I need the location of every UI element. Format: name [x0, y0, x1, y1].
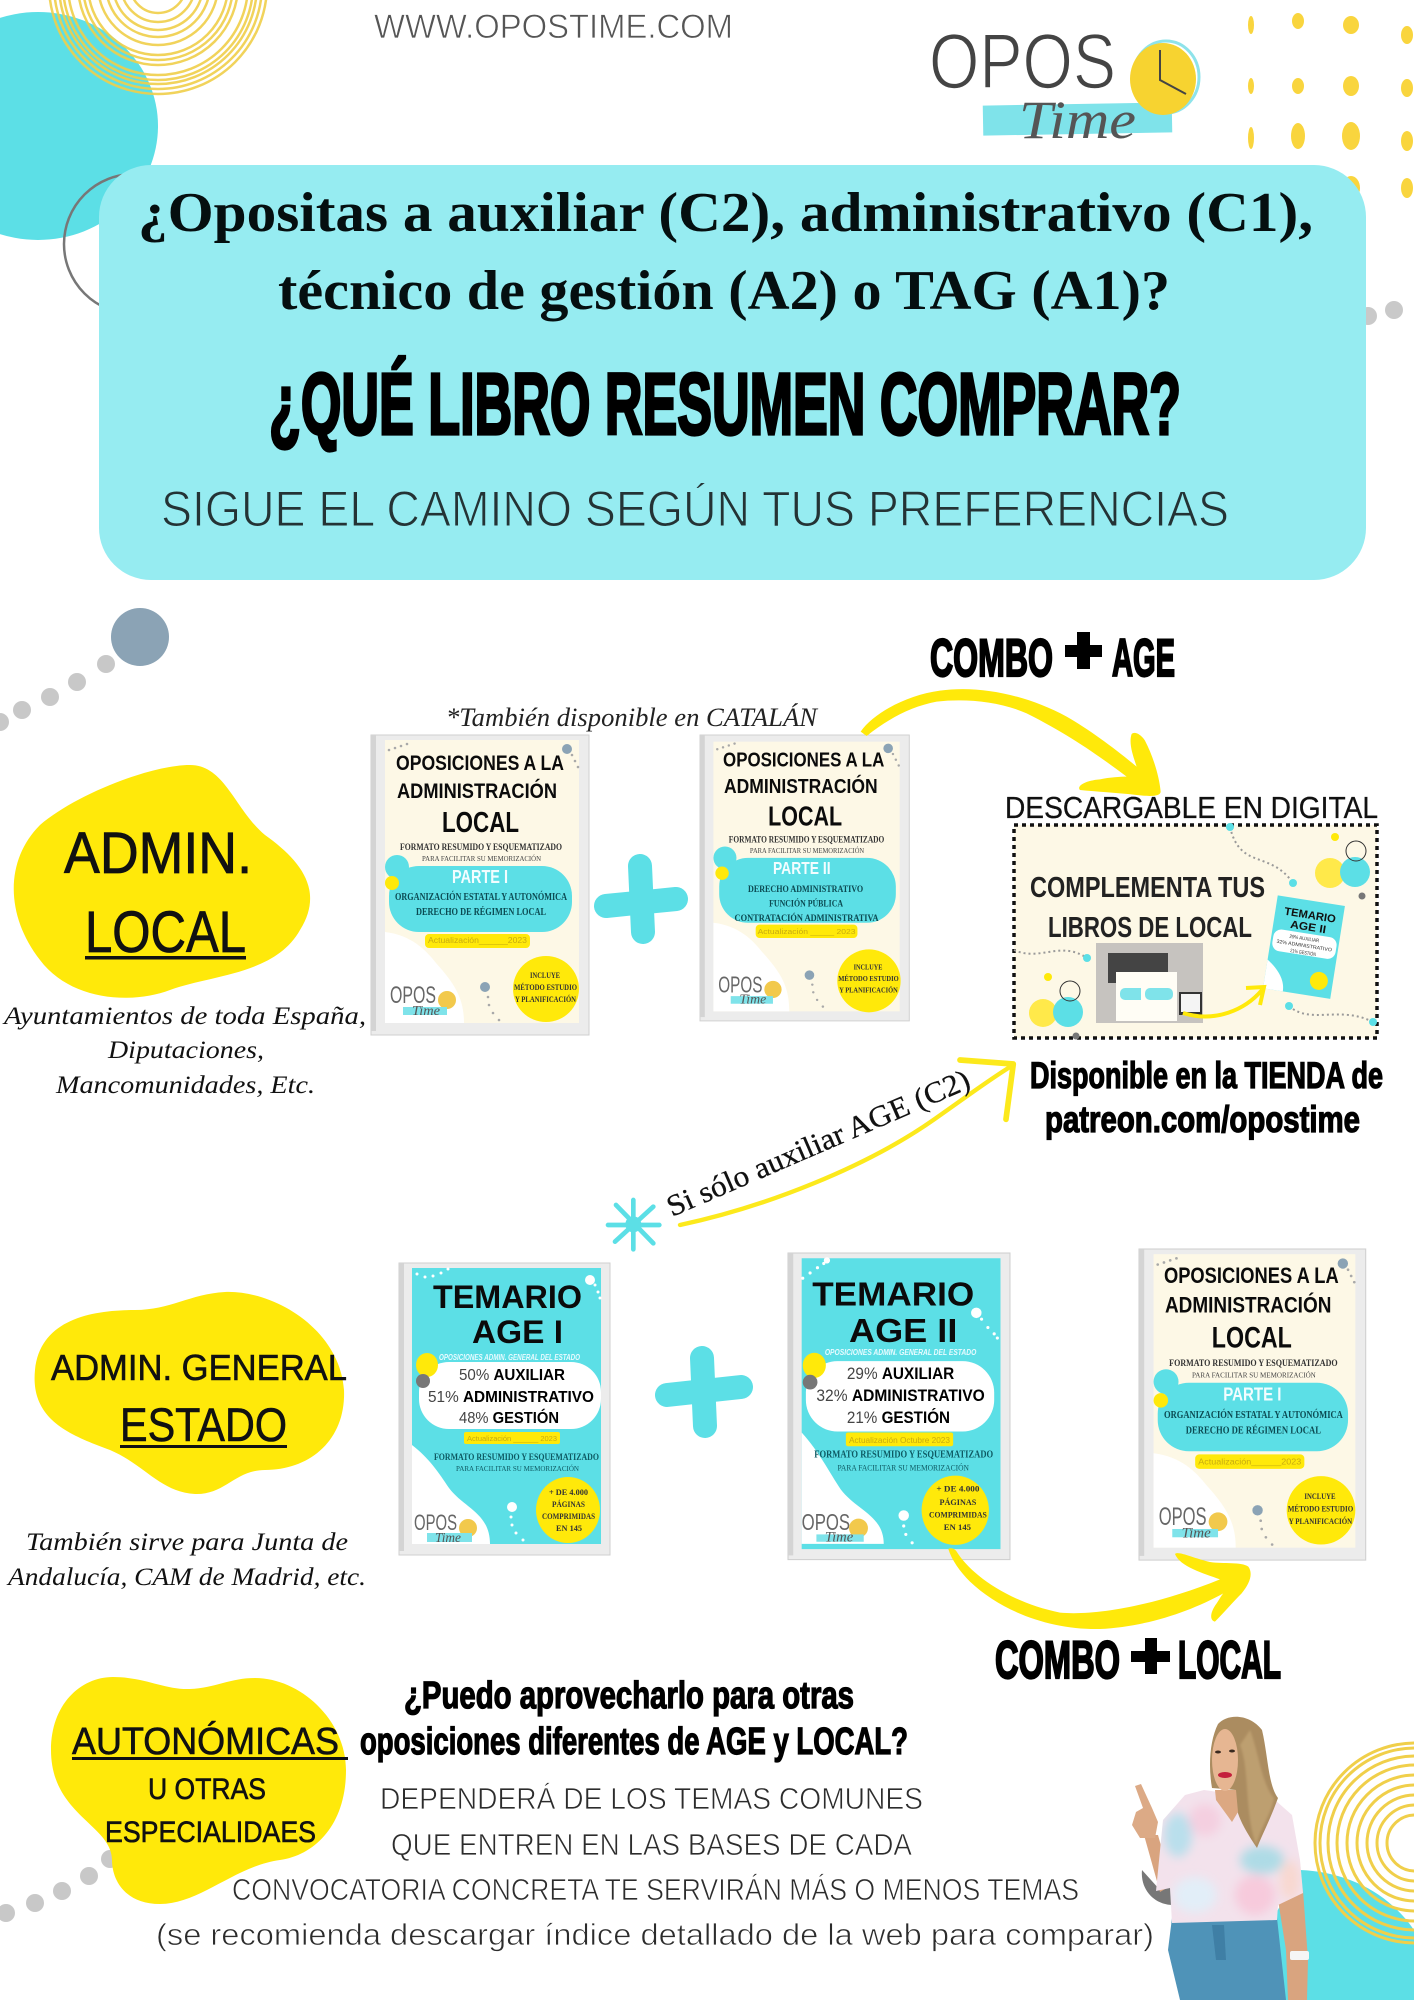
book: Temario AGE II: FORMATO RESUMIDO Y ESQUEMATIZADO	[814, 1450, 993, 1461]
blob label: Admin. General Estado	[35, 1292, 347, 1494]
blob label: Admin. General Estado: ESTADO	[120, 1398, 287, 1451]
icon: teal asterisk	[608, 1200, 659, 1249]
book: Temario AGE I: 48% GESTIÓN	[459, 1408, 559, 1427]
book: Oposiciones Local parte II: Actualización _____ 2023	[758, 927, 856, 936]
panel: digital product: 21% GESTIÓN	[1290, 947, 1317, 958]
book: Oposiciones Local parte II: PARA FACILITAR SU MEMORIZACIÓN	[750, 845, 864, 855]
heading: combo + local: LOCAL	[1178, 1631, 1281, 1690]
book: Oposiciones Local parte I	[371, 735, 589, 1035]
book: Temario AGE II: 21% GESTIÓN	[847, 1408, 950, 1427]
book: Temario AGE I: Actualización ______ 2023	[467, 1434, 557, 1443]
book: Oposiciones Local parte I (combo): Actualización______2023	[1198, 1457, 1302, 1467]
book: Oposiciones Local parte I (combo): MÉTODO ESTUDIO	[1288, 1503, 1354, 1513]
book: Temario AGE II: PARA FACILITAR SU MEMORIZACIÓN	[837, 1462, 969, 1472]
description: Admin. Local: Diputaciones,	[107, 1037, 264, 1064]
book: Oposiciones Local parte I: PARTE I	[452, 867, 508, 887]
book: Oposiciones Local parte II: Y PLANIFICACIÓN	[839, 984, 898, 994]
panel: digital product: AGE II	[1289, 919, 1327, 936]
book: Oposiciones Local parte II: FUNCIÓN PÚBLICA	[769, 898, 843, 910]
decoration: blue circle and grey dots	[0, 608, 169, 731]
book: Oposiciones Local parte I (combo): INCLUYE	[1304, 1492, 1336, 1501]
icon: plus between AGE books	[667, 1358, 741, 1426]
book: Temario AGE I: OPOSICIONES ADMIN. GENERAL DEL ESTADO	[439, 1353, 581, 1362]
book: Temario AGE I: COMPRIMIDAS	[542, 1512, 595, 1521]
book: Temario AGE I: AGE I	[472, 1314, 563, 1350]
book: Oposiciones Local parte I: Actualización______2023	[428, 936, 528, 945]
book: Oposiciones Local parte I (combo): Time	[1182, 1525, 1211, 1541]
book: Oposiciones Local parte I: OPOS	[390, 982, 436, 1009]
book: Oposiciones Local parte I (combo): Y PLANIFICACIÓN	[1289, 1516, 1352, 1526]
decoration: teal shape bottom right	[1275, 1870, 1414, 2000]
book: Oposiciones Local parte II: Time	[739, 992, 766, 1007]
panel: digital product: TEMARIO	[1283, 906, 1337, 926]
panel: digital product: 32% ADMINISTRATIVO	[1276, 939, 1332, 954]
panel: digital product: 29% AUXILIAR	[1289, 934, 1320, 944]
decoration: yellow spiral top left	[49, 0, 267, 94]
decoration: yellow dots top right	[1248, 13, 1413, 200]
note: Catalan edition: *También disponible en CATALÁN	[446, 703, 819, 732]
panel: digital product	[1014, 823, 1377, 1040]
book: Temario AGE II: OPOSICIONES ADMIN. GENERAL DEL ESTADO	[825, 1347, 977, 1357]
book: Oposiciones Local parte I: PARA FACILITAR SU MEMORIZACIÓN	[422, 853, 542, 863]
book: Temario AGE I: OPOS	[414, 1510, 457, 1535]
book: Temario AGE II: Actualización Octubre 2023	[849, 1436, 951, 1445]
heading: combo + local: COMBO	[995, 1631, 1120, 1690]
book: Oposiciones Local parte II: MÉTODO ESTUDIO	[838, 973, 899, 983]
question heading: oposiciones diferentes de AGE y LOCAL?	[360, 1721, 908, 1763]
book: Oposiciones Local parte I (combo): ADMINISTRACIÓN	[1165, 1292, 1331, 1317]
logo: OposTime: OPOS	[929, 17, 1116, 105]
book: Oposiciones Local parte I: Y PLANIFICACIÓN	[515, 994, 576, 1004]
blob label: Admin. General Estado: ADMIN. GENERAL	[51, 1347, 347, 1388]
book: Oposiciones Local parte I: MÉTODO ESTUDIO	[514, 982, 577, 992]
description: Admin. Local: Mancomunidades, Etc.	[55, 1072, 315, 1099]
book: Temario AGE II: Time	[825, 1530, 854, 1546]
book: Temario AGE I: 50% AUXILIAR	[459, 1367, 565, 1384]
logo: OposTime: Time	[1019, 90, 1136, 150]
book: Temario AGE I: FORMATO RESUMIDO Y ESQUEMATIZADO	[434, 1453, 599, 1463]
illustration: presenter pointing up	[1132, 1717, 1309, 2000]
decoration: grey dots bottom left	[0, 1850, 119, 1922]
description: Admin. Estado	[6, 1529, 366, 1591]
heading: combo + AGE: COMBO	[930, 629, 1053, 688]
book: Oposiciones Local parte II: DERECHO ADMINISTRATIVO	[748, 884, 863, 895]
panel: digital product: COMPLEMENTA TUS	[1030, 872, 1265, 904]
answer text	[156, 1781, 1154, 1952]
book: Oposiciones Local parte I (combo): LOCAL	[1212, 1322, 1292, 1355]
text: availability	[1030, 1055, 1383, 1140]
description: Admin. Local: Ayuntamientos de toda España,	[2, 1003, 366, 1030]
description: Admin. Estado: Andalucía, CAM de Madrid, etc.	[6, 1564, 366, 1591]
book: Oposiciones Local parte II: CONTRATACIÓN ADMINISTRATIVA	[735, 912, 879, 924]
book: Oposiciones Local parte II: PARTE II	[773, 858, 831, 878]
book: Temario AGE I: TEMARIO	[433, 1279, 582, 1315]
decoration: teal circle top left	[0, 12, 158, 240]
book: Oposiciones Local parte I: OPOSICIONES A LA	[396, 752, 564, 775]
book: Oposiciones Local parte I (combo): OPOSICIONES A LA	[1164, 1263, 1339, 1288]
book: Temario AGE II: TEMARIO	[812, 1277, 974, 1313]
decoration: grey crescent behind person	[1142, 1870, 1180, 1905]
book: Oposiciones Local parte I: INCLUYE	[530, 971, 560, 980]
subheading: SIGUE EL CAMINO SEGÚN TUS PREFERENCIAS	[161, 481, 1229, 537]
book: Oposiciones Local parte II: OPOS	[718, 971, 762, 997]
blob label: Autonómicas: U OTRAS	[148, 1773, 266, 1806]
book: Oposiciones Local parte II: ADMINISTRACIÓN	[724, 774, 878, 798]
description: Admin. Estado: También sirve para Junta de	[26, 1529, 348, 1556]
decoration: grey dots right of panel	[1359, 301, 1403, 325]
book: Oposiciones Local parte I (combo): OPOS	[1159, 1503, 1207, 1531]
book: Oposiciones Local parte II: OPOSICIONES A LA	[723, 750, 884, 771]
book: Temario AGE I: PÁGINAS	[552, 1499, 585, 1509]
book: Temario AGE I: + DE 4.000	[549, 1488, 588, 1497]
book: Temario AGE II: PÁGINAS	[939, 1497, 977, 1507]
answer text: QUE ENTREN EN LAS BASES DE CADA	[391, 1827, 912, 1862]
book: Temario AGE II: 32% ADMINISTRATIVO	[816, 1386, 985, 1405]
book: Temario AGE II: EN 145	[944, 1523, 971, 1532]
blob label: Admin. Local	[14, 765, 310, 998]
book: Oposiciones Local parte I: LOCAL	[442, 807, 519, 839]
logo: OposTime	[929, 17, 1199, 150]
book: Temario AGE II: AGE II	[849, 1313, 957, 1350]
blob label: Autonómicas: ESPECIALIDAES	[105, 1816, 316, 1849]
heading: downloadable: DESCARGABLE EN DIGITAL	[1005, 790, 1378, 825]
book: Temario AGE I	[399, 1263, 610, 1555]
book: Oposiciones Local parte I: ORGANIZACIÓN ESTATAL Y AUTONÓMICA	[395, 891, 568, 903]
book: Temario AGE II	[788, 1253, 1010, 1560]
book: Oposiciones Local parte I: DERECHO DE RÉGIMEN LOCAL	[416, 906, 546, 918]
book: Oposiciones Local parte I: ADMINISTRACIÓN	[397, 779, 557, 803]
blob label: Autonómicas	[51, 1677, 348, 1904]
book: Temario AGE I: PARA FACILITAR SU MEMORIZACIÓN	[456, 1463, 580, 1473]
blob label: Admin. Local: LOCAL	[85, 900, 246, 965]
book: Temario AGE II: 29% AUXILIAR	[847, 1364, 954, 1383]
answer text: (se recomienda descargar índice detallado de la web para comparar)	[156, 1917, 1154, 1952]
decoration: grey ring behind panel	[64, 174, 204, 314]
book: Oposiciones Local parte I: Time	[412, 1004, 440, 1019]
book: Oposiciones Local parte I (combo): ORGANIZACIÓN ESTATAL Y AUTONÓMICA	[1164, 1409, 1343, 1421]
book: Oposiciones Local parte I (combo): DERECHO DE RÉGIMEN LOCAL	[1186, 1425, 1321, 1437]
book: Oposiciones Local parte II: FORMATO RESUMIDO Y ESQUEMATIZADO	[729, 835, 884, 845]
label: si solo auxiliar: Si sólo auxiliar AGE (C2)	[662, 1063, 975, 1223]
book: Oposiciones Local parte I (combo): PARA FACILITAR SU MEMORIZACIÓN	[1192, 1370, 1316, 1380]
book: Oposiciones Local parte II: LOCAL	[768, 801, 842, 832]
blob label: Admin. Local: ADMIN.	[64, 821, 252, 886]
icon: plus between Local books	[606, 866, 676, 932]
book: Temario AGE II: COMPRIMIDAS	[929, 1511, 987, 1520]
book: Oposiciones Local parte I (combo)	[1139, 1249, 1366, 1560]
book: Oposiciones Local parte I: FORMATO RESUMIDO Y ESQUEMATIZADO	[400, 843, 562, 853]
book: Temario AGE I: Time	[435, 1531, 461, 1546]
arrow: AGE to local combo	[948, 1548, 1251, 1629]
heading: combo + AGE: AGE	[1112, 629, 1175, 688]
answer text: DEPENDERÁ DE LOS TEMAS COMUNES	[380, 1781, 923, 1816]
description: Admin. Local	[2, 1003, 366, 1099]
book: Oposiciones Local parte I (combo): FORMATO RESUMIDO Y ESQUEMATIZADO	[1169, 1358, 1338, 1369]
answer text: CONVOCATORIA CONCRETA TE SERVIRÁN MÁS O MENOS TEMAS	[232, 1872, 1079, 1907]
question heading: ¿Puedo aprovecharlo para otras	[404, 1675, 854, 1717]
book: Temario AGE II: + DE 4.000	[936, 1484, 979, 1493]
book: Oposiciones Local parte II: INCLUYE	[854, 962, 882, 971]
book: Temario AGE I: EN 145	[556, 1524, 582, 1533]
book: Temario AGE I: 51% ADMINISTRATIVO	[428, 1389, 594, 1406]
arrow: book to digital combo	[861, 689, 1161, 796]
arrow: only auxiliar AGE	[680, 1060, 1013, 1225]
blob label: Autonómicas: AUTONÓMICAS	[72, 1720, 339, 1763]
book: Temario AGE II: OPOS	[802, 1509, 850, 1535]
website address: WWW.OPOSTIME.COM	[374, 8, 733, 46]
book: Oposiciones Local parte I (combo): PARTE I	[1223, 1383, 1281, 1404]
book: Oposiciones Local parte II	[700, 735, 909, 1021]
panel: hero header	[99, 165, 1366, 580]
question heading	[360, 1675, 908, 1763]
panel: digital product: LIBROS DE LOCAL	[1048, 912, 1252, 944]
heading question line 2: técnico de gestión (A2) o TAG (A1)?	[278, 260, 1170, 322]
decoration: yellow spiral bottom right	[1315, 1743, 1414, 1943]
heading question line 1: ¿Opositas a auxiliar (C2), administrativo (C1),	[138, 182, 1313, 244]
